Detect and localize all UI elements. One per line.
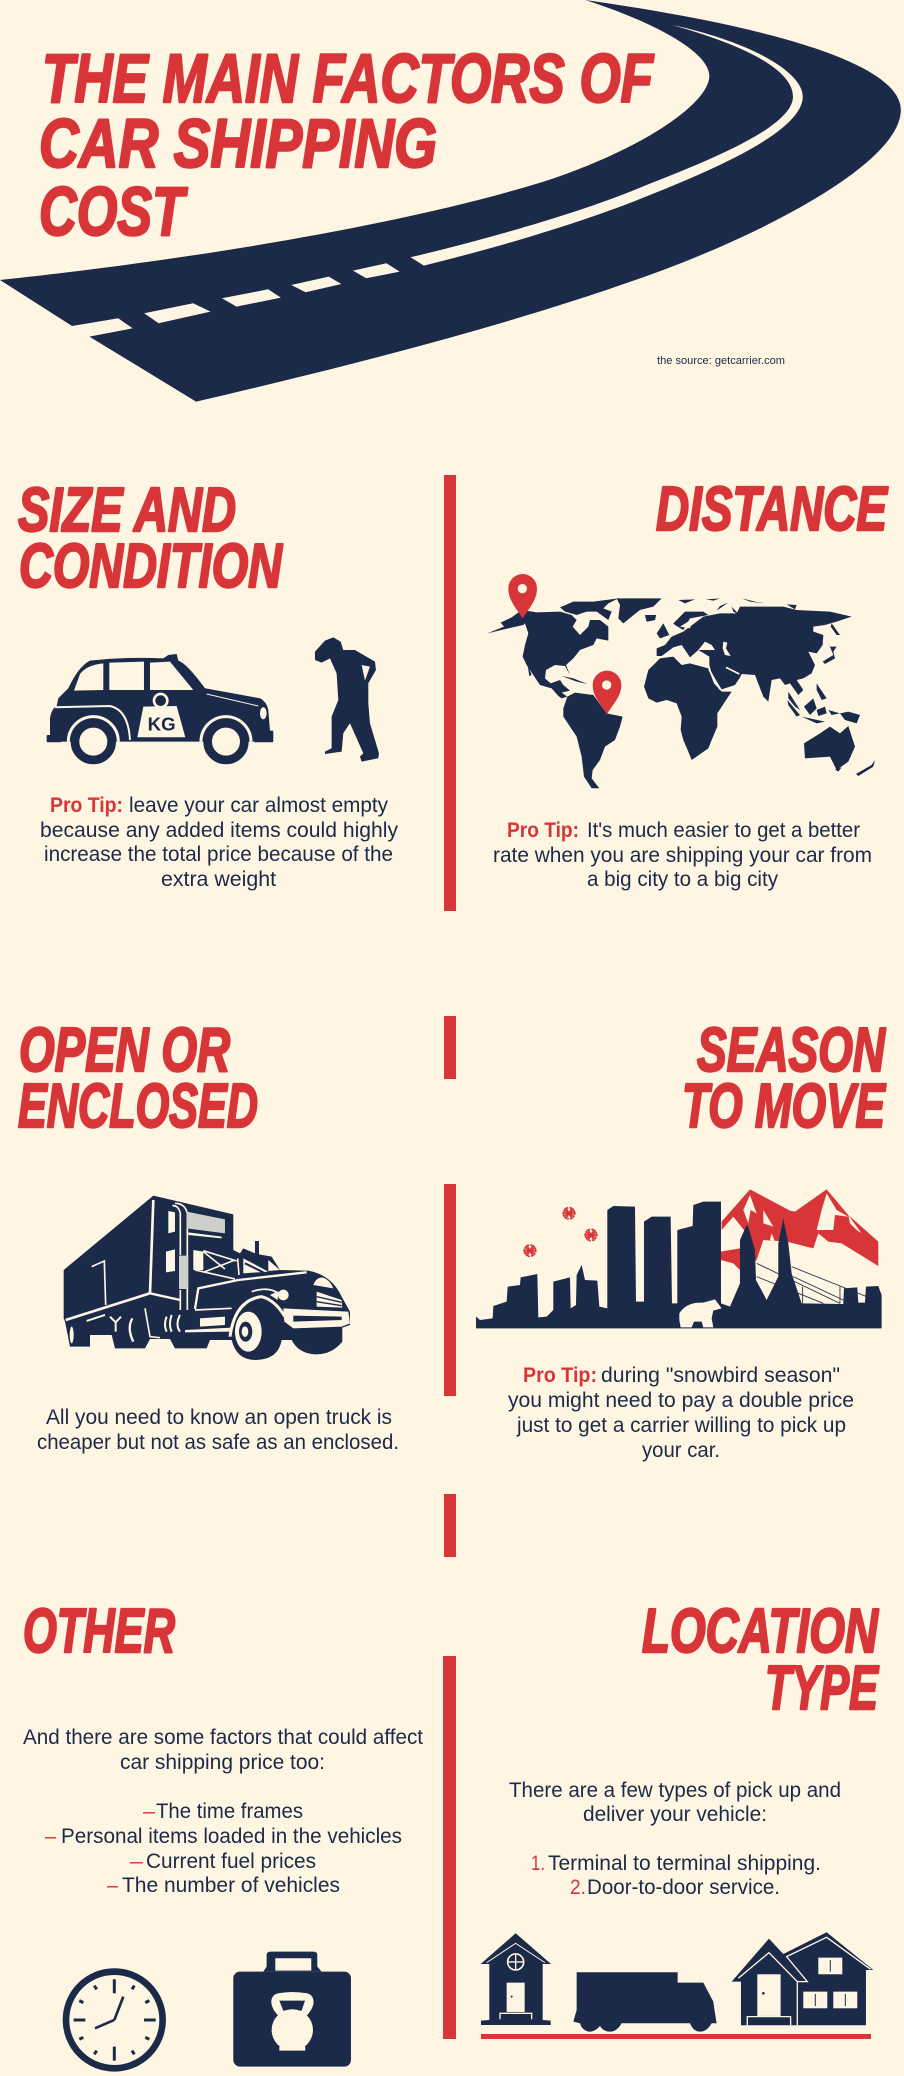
skyline: [476, 1202, 882, 1328]
text: distance pro tip: [493, 818, 872, 891]
heading: season to move: [682, 1016, 886, 1141]
text: season pro tip: you might need to pay a double price: [508, 1388, 854, 1412]
heading: other: OTHER: [23, 1597, 175, 1666]
list: location types: Door-to-door service.: [587, 1875, 780, 1899]
text: size pro tip: extra weight: [161, 867, 276, 891]
title: COST: [39, 173, 188, 250]
panel: distance: [487, 475, 888, 891]
snowflakes: [523, 1208, 598, 1256]
list: other factors: –: [130, 1849, 143, 1873]
center divider bars: [443, 475, 456, 2039]
panel: other: [23, 1597, 423, 2068]
icon: car with weight: [47, 654, 273, 760]
title: CAR SHIPPING: [39, 105, 437, 182]
list: location types: [531, 1851, 821, 1899]
panel: season to move: [476, 1016, 886, 1462]
text: season pro tip: during "snowbird season": [601, 1363, 840, 1387]
text: size pro tip: leave your car almost empty: [129, 793, 388, 817]
heading: size and condition: SIZE AND: [18, 476, 236, 545]
list: other factors: The number of vehicles: [122, 1873, 340, 1897]
polar bear: [679, 1299, 722, 1327]
heading: size and condition: [18, 476, 283, 601]
map: americas: [487, 598, 662, 788]
icon: delivery truck: [573, 1972, 717, 2032]
text: distance pro tip: a big city to a big city: [587, 867, 778, 891]
list: other factors: [45, 1799, 402, 1897]
list: other factors: Current fuel prices: [146, 1849, 316, 1873]
icon: small house: [481, 1933, 551, 2025]
list: location types: Terminal to terminal shipping.: [548, 1851, 821, 1875]
icon: world map with pins: [487, 574, 875, 788]
text: season pro tip: [508, 1363, 854, 1462]
map: old world: [644, 598, 875, 776]
icon: car with weight: KG: [148, 714, 176, 735]
text: size pro tip: Pro Tip:: [50, 793, 123, 817]
heading: open or enclosed: [18, 1016, 258, 1141]
text: location intro: There are a few types of pick up and: [509, 1778, 841, 1802]
icon: briefcase with kettlebell: [233, 1952, 351, 2067]
heading: open or enclosed: ENCLOSED: [18, 1072, 258, 1141]
list: location types: 1.: [531, 1851, 545, 1875]
text: open or enclosed: cheaper but not as safe as an enclosed.: [37, 1430, 399, 1454]
list: other factors: –: [143, 1799, 155, 1823]
text: other factors intro: And there are some factors that could affect: [23, 1725, 423, 1749]
heading: location type: [642, 1597, 879, 1723]
icon: worried man: [315, 637, 379, 762]
text: season pro tip: Pro Tip:: [523, 1363, 597, 1387]
text: location intro: [509, 1778, 841, 1826]
text: open or enclosed: All you need to know an open truck is: [46, 1405, 392, 1429]
list: other factors: Personal items loaded in the vehicles: [61, 1824, 402, 1848]
text: distance pro tip: Pro Tip:: [507, 818, 579, 842]
list: location types: 2.: [570, 1875, 586, 1899]
mountains: [721, 1189, 878, 1270]
list: other factors: –: [45, 1824, 56, 1848]
source note: the source: getcarrier.com: [657, 355, 785, 367]
icon: semi truck: [64, 1196, 350, 1360]
heading: size and condition: CONDITION: [19, 532, 283, 601]
list: other factors: The time frames: [156, 1799, 303, 1823]
panel: location type: [481, 1597, 879, 2039]
text: size pro tip: [40, 793, 398, 891]
text: distance pro tip: rate when you are shipping your car from: [493, 843, 872, 867]
road illustration: [0, 0, 901, 402]
panel: size and condition: [18, 476, 398, 891]
icon: large house: [732, 1932, 873, 2025]
map pins: [508, 574, 621, 714]
panel: open or enclosed: [18, 1016, 399, 1454]
heading: open or enclosed: OPEN OR: [19, 1016, 230, 1085]
text: other factors intro: car shipping price too:: [120, 1750, 325, 1774]
title: THE MAIN FACTORS OF: [42, 40, 654, 117]
ground line: [481, 2034, 871, 2039]
text: open or enclosed: [37, 1405, 399, 1454]
text: location intro: deliver your vehicle:: [583, 1802, 767, 1826]
text: distance pro tip: It's much easier to get a better: [587, 818, 860, 842]
title: [39, 40, 654, 250]
text: season pro tip: just to get a carrier willing to pick up: [516, 1413, 846, 1437]
text: size pro tip: increase the total price because of the: [44, 842, 393, 866]
icon: clock: [66, 1972, 163, 2068]
illustration: winter city skyline: [476, 1189, 882, 1328]
text: size pro tip: because any added items could highly: [40, 818, 398, 842]
text: other factors intro: [23, 1725, 423, 1774]
list: other factors: –: [107, 1873, 118, 1897]
text: season pro tip: your car.: [642, 1438, 720, 1462]
